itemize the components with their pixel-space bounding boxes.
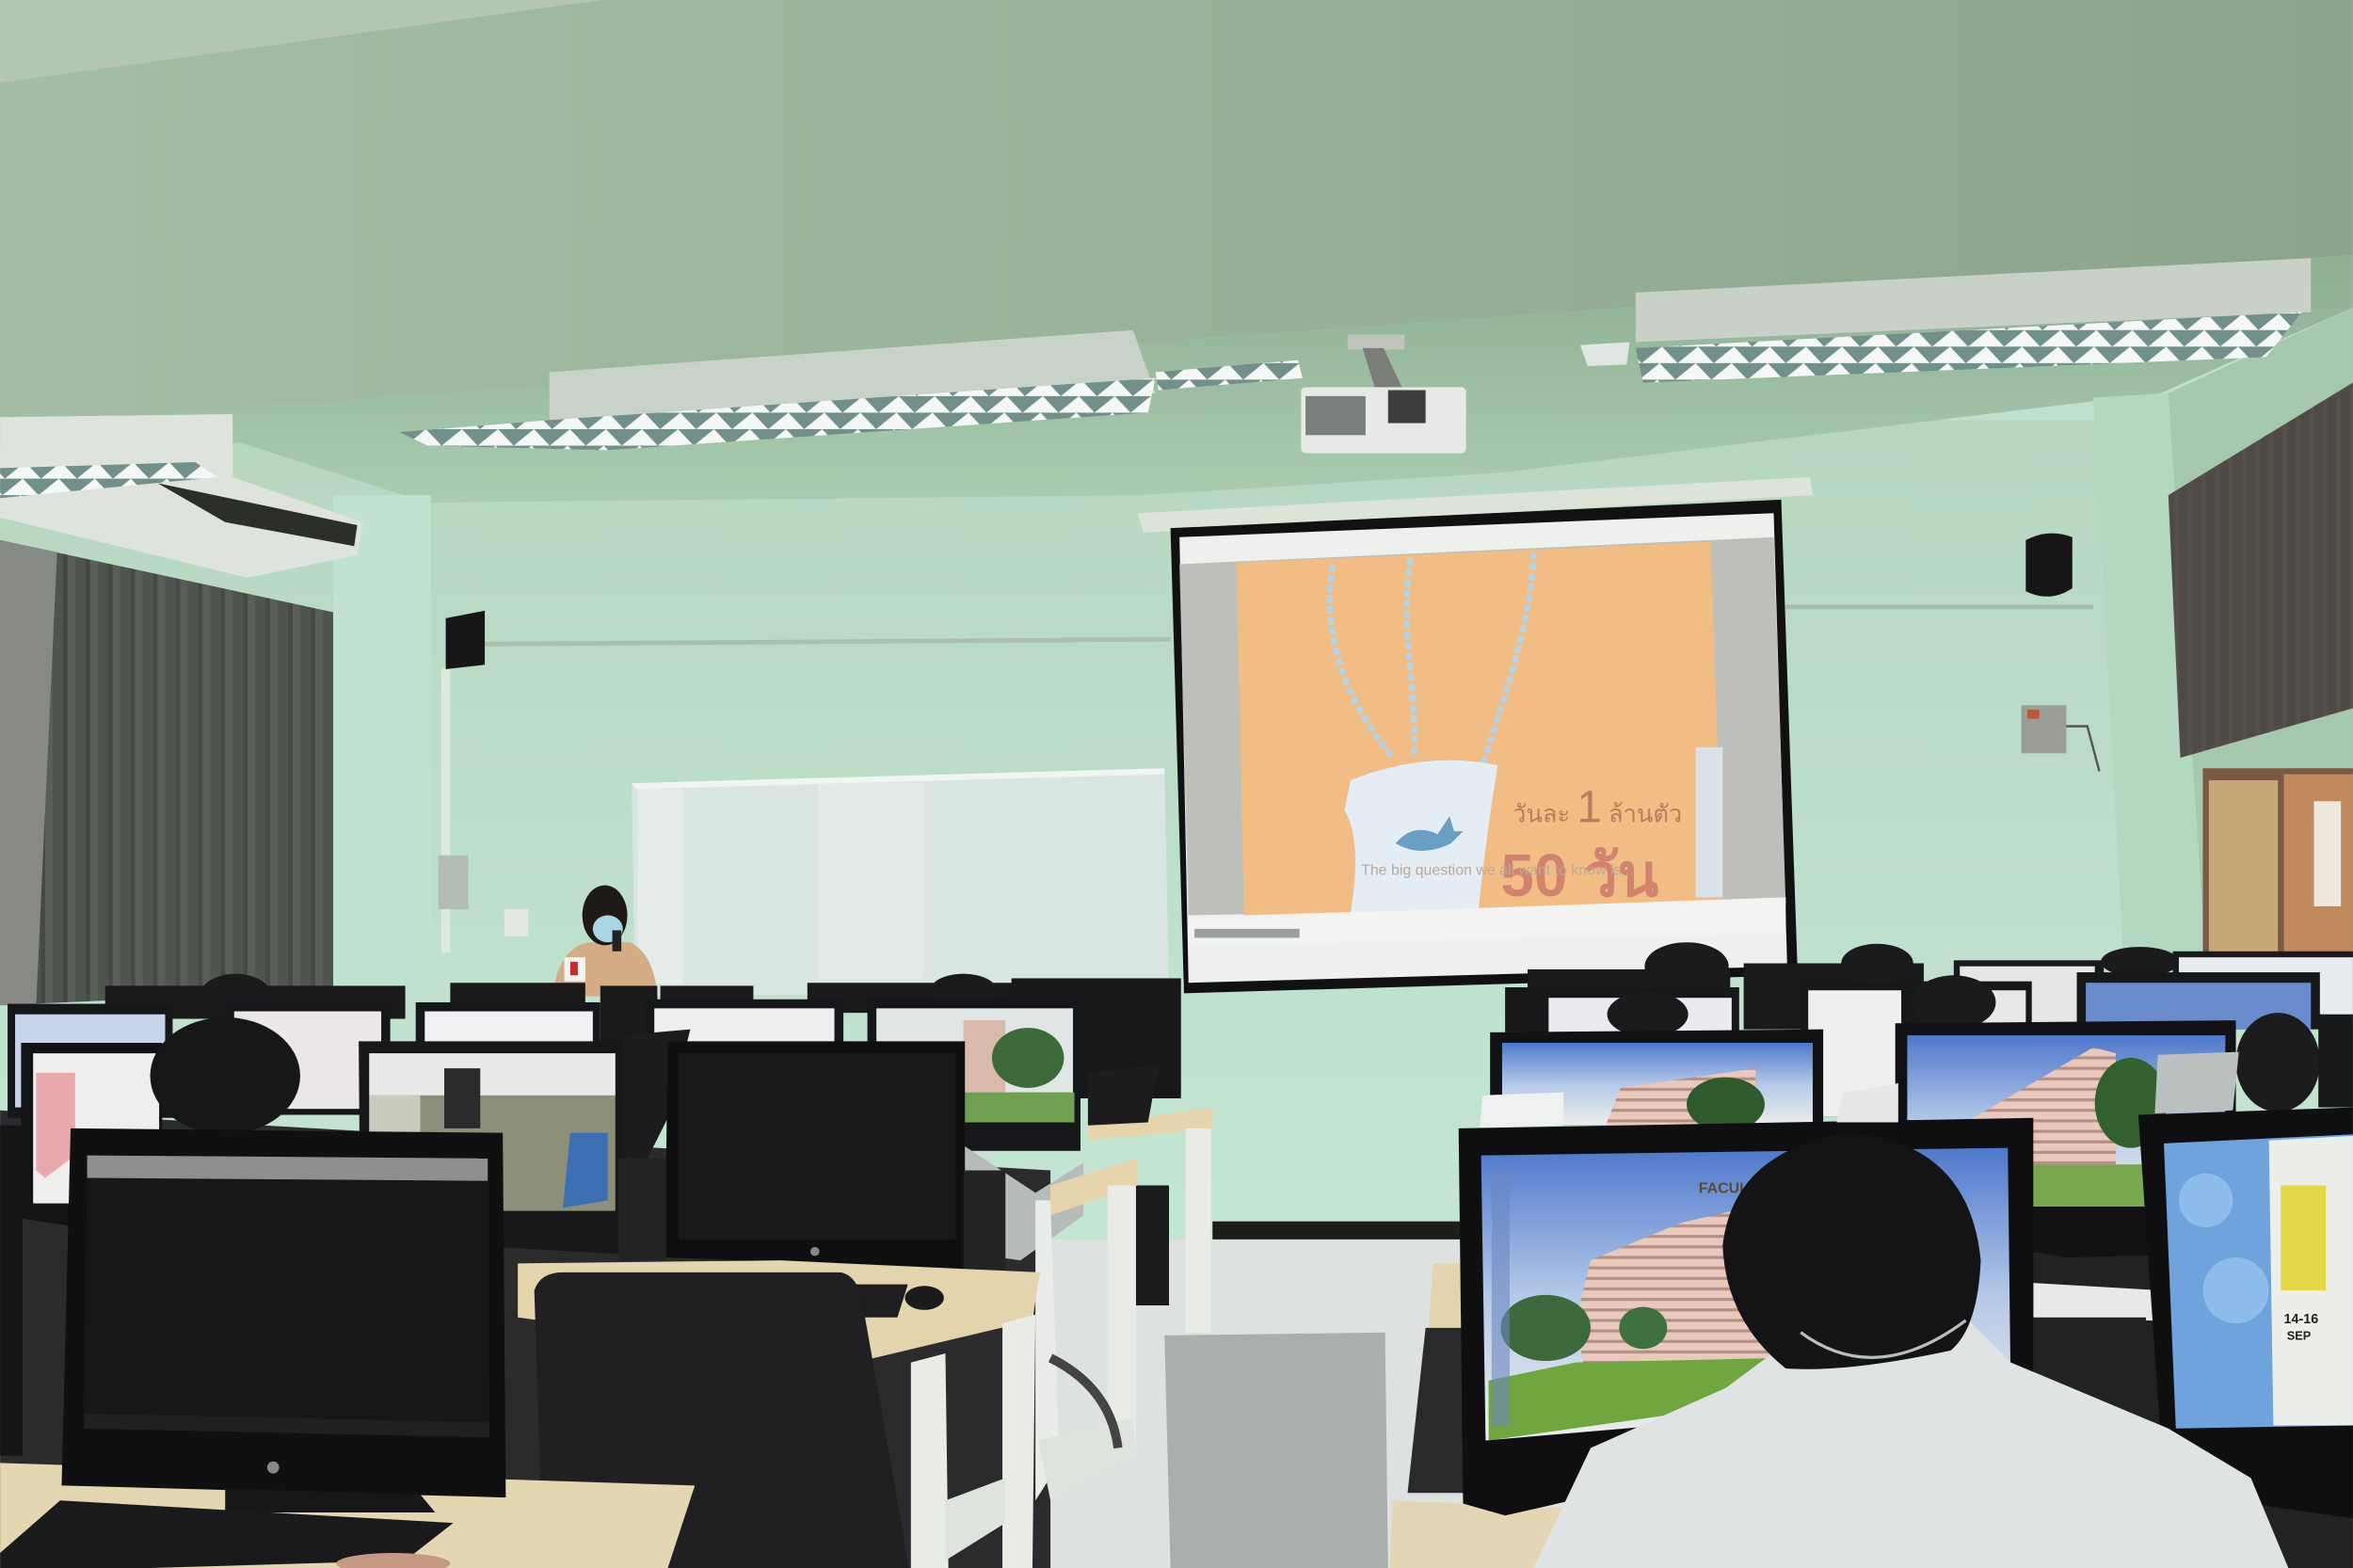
chair right of centre monitor [964, 1171, 1005, 1270]
right monitor row 3 left [1490, 1030, 1823, 1131]
floor [0, 1240, 2353, 1568]
chair centre [535, 1272, 909, 1568]
ceiling light left [399, 330, 1156, 450]
projection screen [1171, 500, 1798, 993]
foreground right monitor: FACULTY [1699, 1180, 1767, 1196]
cable rack [1050, 1358, 1118, 1448]
wall switch box [2022, 705, 2099, 771]
student centre hair [623, 1030, 690, 1163]
projector [1301, 335, 1466, 453]
centre monitor [664, 1041, 965, 1270]
paper on monitor [2154, 1052, 2239, 1113]
foreground right edge monitor: SEP [2287, 1329, 2312, 1343]
left curtain [0, 540, 333, 1005]
slide: orange panel: วันละ 1 ล้านตัว [1513, 783, 1682, 833]
mouse centre [904, 1286, 944, 1310]
paper on monitor small [1480, 1093, 1563, 1128]
speaker right [2025, 534, 2073, 597]
student sleeve in background [1836, 1083, 1898, 1123]
right wall column [2093, 393, 2206, 960]
rear foreground student hand [336, 1553, 450, 1568]
speaker left [446, 611, 485, 669]
ceiling soffit [0, 0, 2353, 426]
back wall [0, 420, 2353, 1260]
monitor edge left [0, 1126, 23, 1455]
doors [2202, 768, 2353, 956]
foreground left monitor [61, 1128, 505, 1512]
screen casing [1138, 477, 1813, 533]
slide: orange panel: 50 วัน [1500, 841, 1659, 909]
chair left of centre monitor [618, 1159, 666, 1260]
right row 2 monitors [1505, 972, 2353, 1116]
foreground right monitor [1459, 1118, 2033, 1515]
right side wall [2169, 308, 2353, 960]
pipes on wall [439, 604, 2093, 952]
seated student mid [960, 1144, 1169, 1305]
desk centre right [1035, 1159, 1138, 1500]
right monitor row 3 right [1896, 1020, 2236, 1257]
dark under-desk area right [2010, 1245, 2353, 1568]
left wall column [333, 495, 431, 990]
right desk edges [1389, 1263, 2161, 1568]
foreground right edge monitor [2138, 1108, 2353, 1518]
centre desk [518, 1260, 1040, 1568]
ceiling top corner [0, 0, 600, 83]
map monitor [359, 1041, 626, 1255]
lower ceiling [0, 255, 2353, 503]
ceiling light right [1580, 258, 2311, 383]
grey paper board [1164, 1333, 1388, 1568]
foreground left desk [0, 1463, 695, 1568]
slide: orange panel: The big question we all want to know is... [1361, 862, 1634, 878]
slide: orange panel [1237, 542, 1722, 915]
keyboard centre [849, 1285, 908, 1318]
right curtain [2169, 383, 2353, 758]
foreground student [1533, 1133, 2288, 1568]
dark under-desk area left [0, 1111, 1050, 1568]
wall skirting [1212, 1222, 1460, 1240]
student head left [151, 1017, 300, 1134]
left mid monitor [21, 1043, 162, 1240]
foreground left keyboard [0, 1500, 454, 1568]
row 2 monitors left [8, 998, 1080, 1151]
back row monitors left [105, 974, 1181, 1098]
ceiling light small [1156, 360, 1303, 391]
presenter [552, 886, 657, 997]
foreground right edge monitor: 14-16 [2284, 1312, 2318, 1327]
whiteboard [632, 768, 1169, 997]
desk far centre [1088, 1065, 1212, 1333]
right rear monitors [1528, 942, 2353, 1035]
air conditioner [0, 414, 363, 578]
